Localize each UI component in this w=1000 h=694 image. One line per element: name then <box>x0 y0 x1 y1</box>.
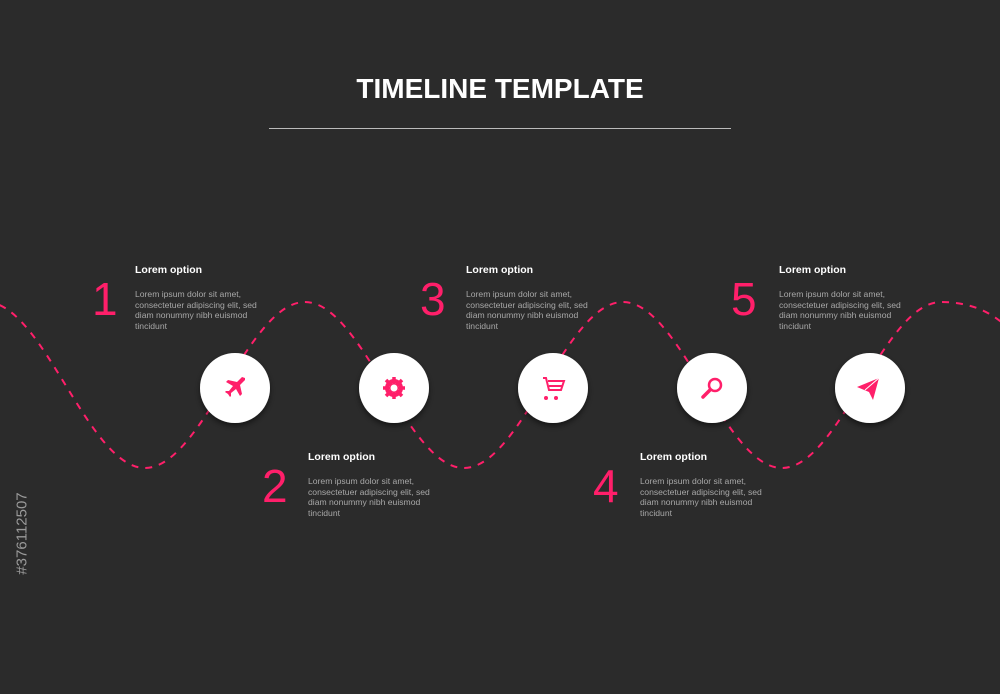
step 4: 4 <box>593 460 619 512</box>
step 5: Lorem option <box>779 264 846 276</box>
step 4 <box>593 451 762 518</box>
icon: gear <box>359 353 429 423</box>
step 5 <box>731 264 901 331</box>
icon: search <box>677 353 747 423</box>
icon: plane <box>200 353 270 423</box>
step 3: Lorem ipsum dolor sit amet, consectetuer adipiscing elit, sed diam nonummy nibh euismod tincidunt <box>466 289 588 331</box>
step 1: 1 <box>92 273 118 325</box>
step 1: Lorem option <box>135 264 202 276</box>
step 3: 3 <box>420 273 446 325</box>
title: TIMELINE TEMPLATE <box>356 73 644 104</box>
step 2: Lorem option <box>308 451 375 463</box>
step 2: Lorem ipsum dolor sit amet, consectetuer adipiscing elit, sed diam nonummy nibh euismod tincidunt <box>308 476 430 518</box>
step 5: 5 <box>731 273 757 325</box>
step 4: Lorem option <box>640 451 707 463</box>
icon: paper plane <box>835 353 905 423</box>
step 1 <box>92 264 257 331</box>
step 1: Lorem ipsum dolor sit amet, consectetuer adipiscing elit, sed diam nonummy nibh euismod tincidunt <box>135 289 257 331</box>
step 4: Lorem ipsum dolor sit amet, consectetuer adipiscing elit, sed diam nonummy nibh euismod tincidunt <box>640 476 762 518</box>
step 5: Lorem ipsum dolor sit amet, consectetuer adipiscing elit, sed diam nonummy nibh euismod tincidunt <box>779 289 901 331</box>
step 2 <box>262 451 430 518</box>
step 2: 2 <box>262 460 288 512</box>
vertical id text: #376112507 <box>14 492 30 575</box>
icon: cart <box>518 353 588 423</box>
step 3: Lorem option <box>466 264 533 276</box>
step 3 <box>420 264 588 331</box>
